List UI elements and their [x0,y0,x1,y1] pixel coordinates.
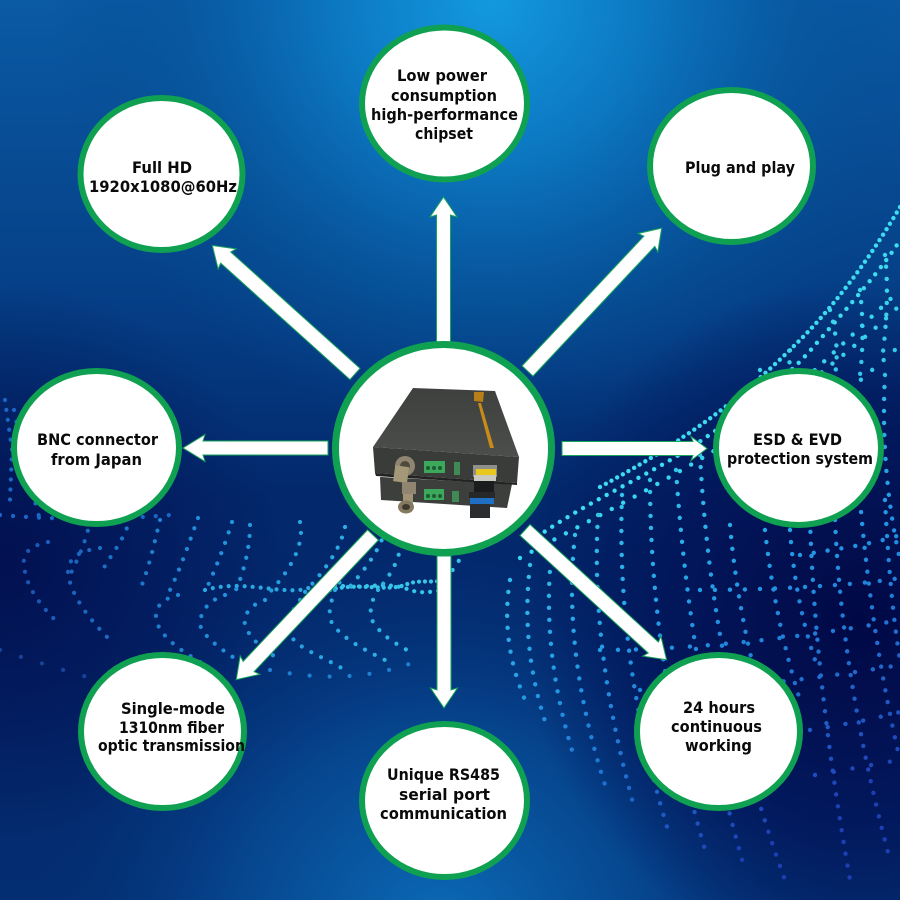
dotted particle wave: left [0,400,470,690]
feature: low power consumption: Low power [397,66,487,85]
arrow: to plug and play [518,219,672,380]
feature: 24 hours working: working [685,736,752,755]
feature: RS485 serial port: Unique RS485 [387,765,500,784]
feature: single-mode fiber: optic transmission [98,736,245,755]
feature: BNC connector: from Japan [51,450,142,469]
feature: BNC connector: BNC connector [37,430,158,449]
feature: 24 hours working: continuous [671,717,762,736]
feature: single-mode fiber: Single-mode [121,699,225,718]
feature: 24 hours working: 24 hours [683,698,755,717]
feature: low power consumption: chipset [415,124,473,143]
arrow: to single-mode fiber [226,526,383,689]
feature: low power consumption [362,28,527,180]
feature: RS485 serial port: communication [380,804,507,823]
feature: RS485 serial port: serial port [399,785,490,804]
arrow: to low power consumption [430,197,457,342]
feature: plug and play [650,90,813,242]
feature: single-mode fiber [81,655,245,808]
feature: single-mode fiber: 1310nm fiber [119,718,224,737]
dotted particle wave: right [507,207,900,880]
feature: ESD and EVD protection [716,371,881,525]
arrow: to ESD protection [562,436,707,460]
arrow: to Full HD [203,235,364,384]
feature: plug and play: Plug and play [685,158,796,177]
center circle with product [336,344,552,552]
arrow: to 24 hours working [516,520,676,670]
feature: full HD: 1920x1080@60Hz [89,177,237,196]
arrow: to BNC connector [183,434,328,462]
feature: 24 hours working [637,655,800,808]
feature: low power consumption: consumption [391,86,497,105]
product photo: stacked converters [373,388,519,518]
feature: full HD: Full HD [132,158,192,177]
feature: ESD and EVD protection: ESD & EVD [753,430,842,449]
feature: low power consumption: high-performance [371,105,518,124]
feature: full HD [80,98,242,250]
feature: BNC connector [14,371,179,524]
arrow: to RS485 [430,556,458,708]
feature: RS485 serial port [362,724,527,877]
feature: ESD and EVD protection: protection system [727,449,873,468]
